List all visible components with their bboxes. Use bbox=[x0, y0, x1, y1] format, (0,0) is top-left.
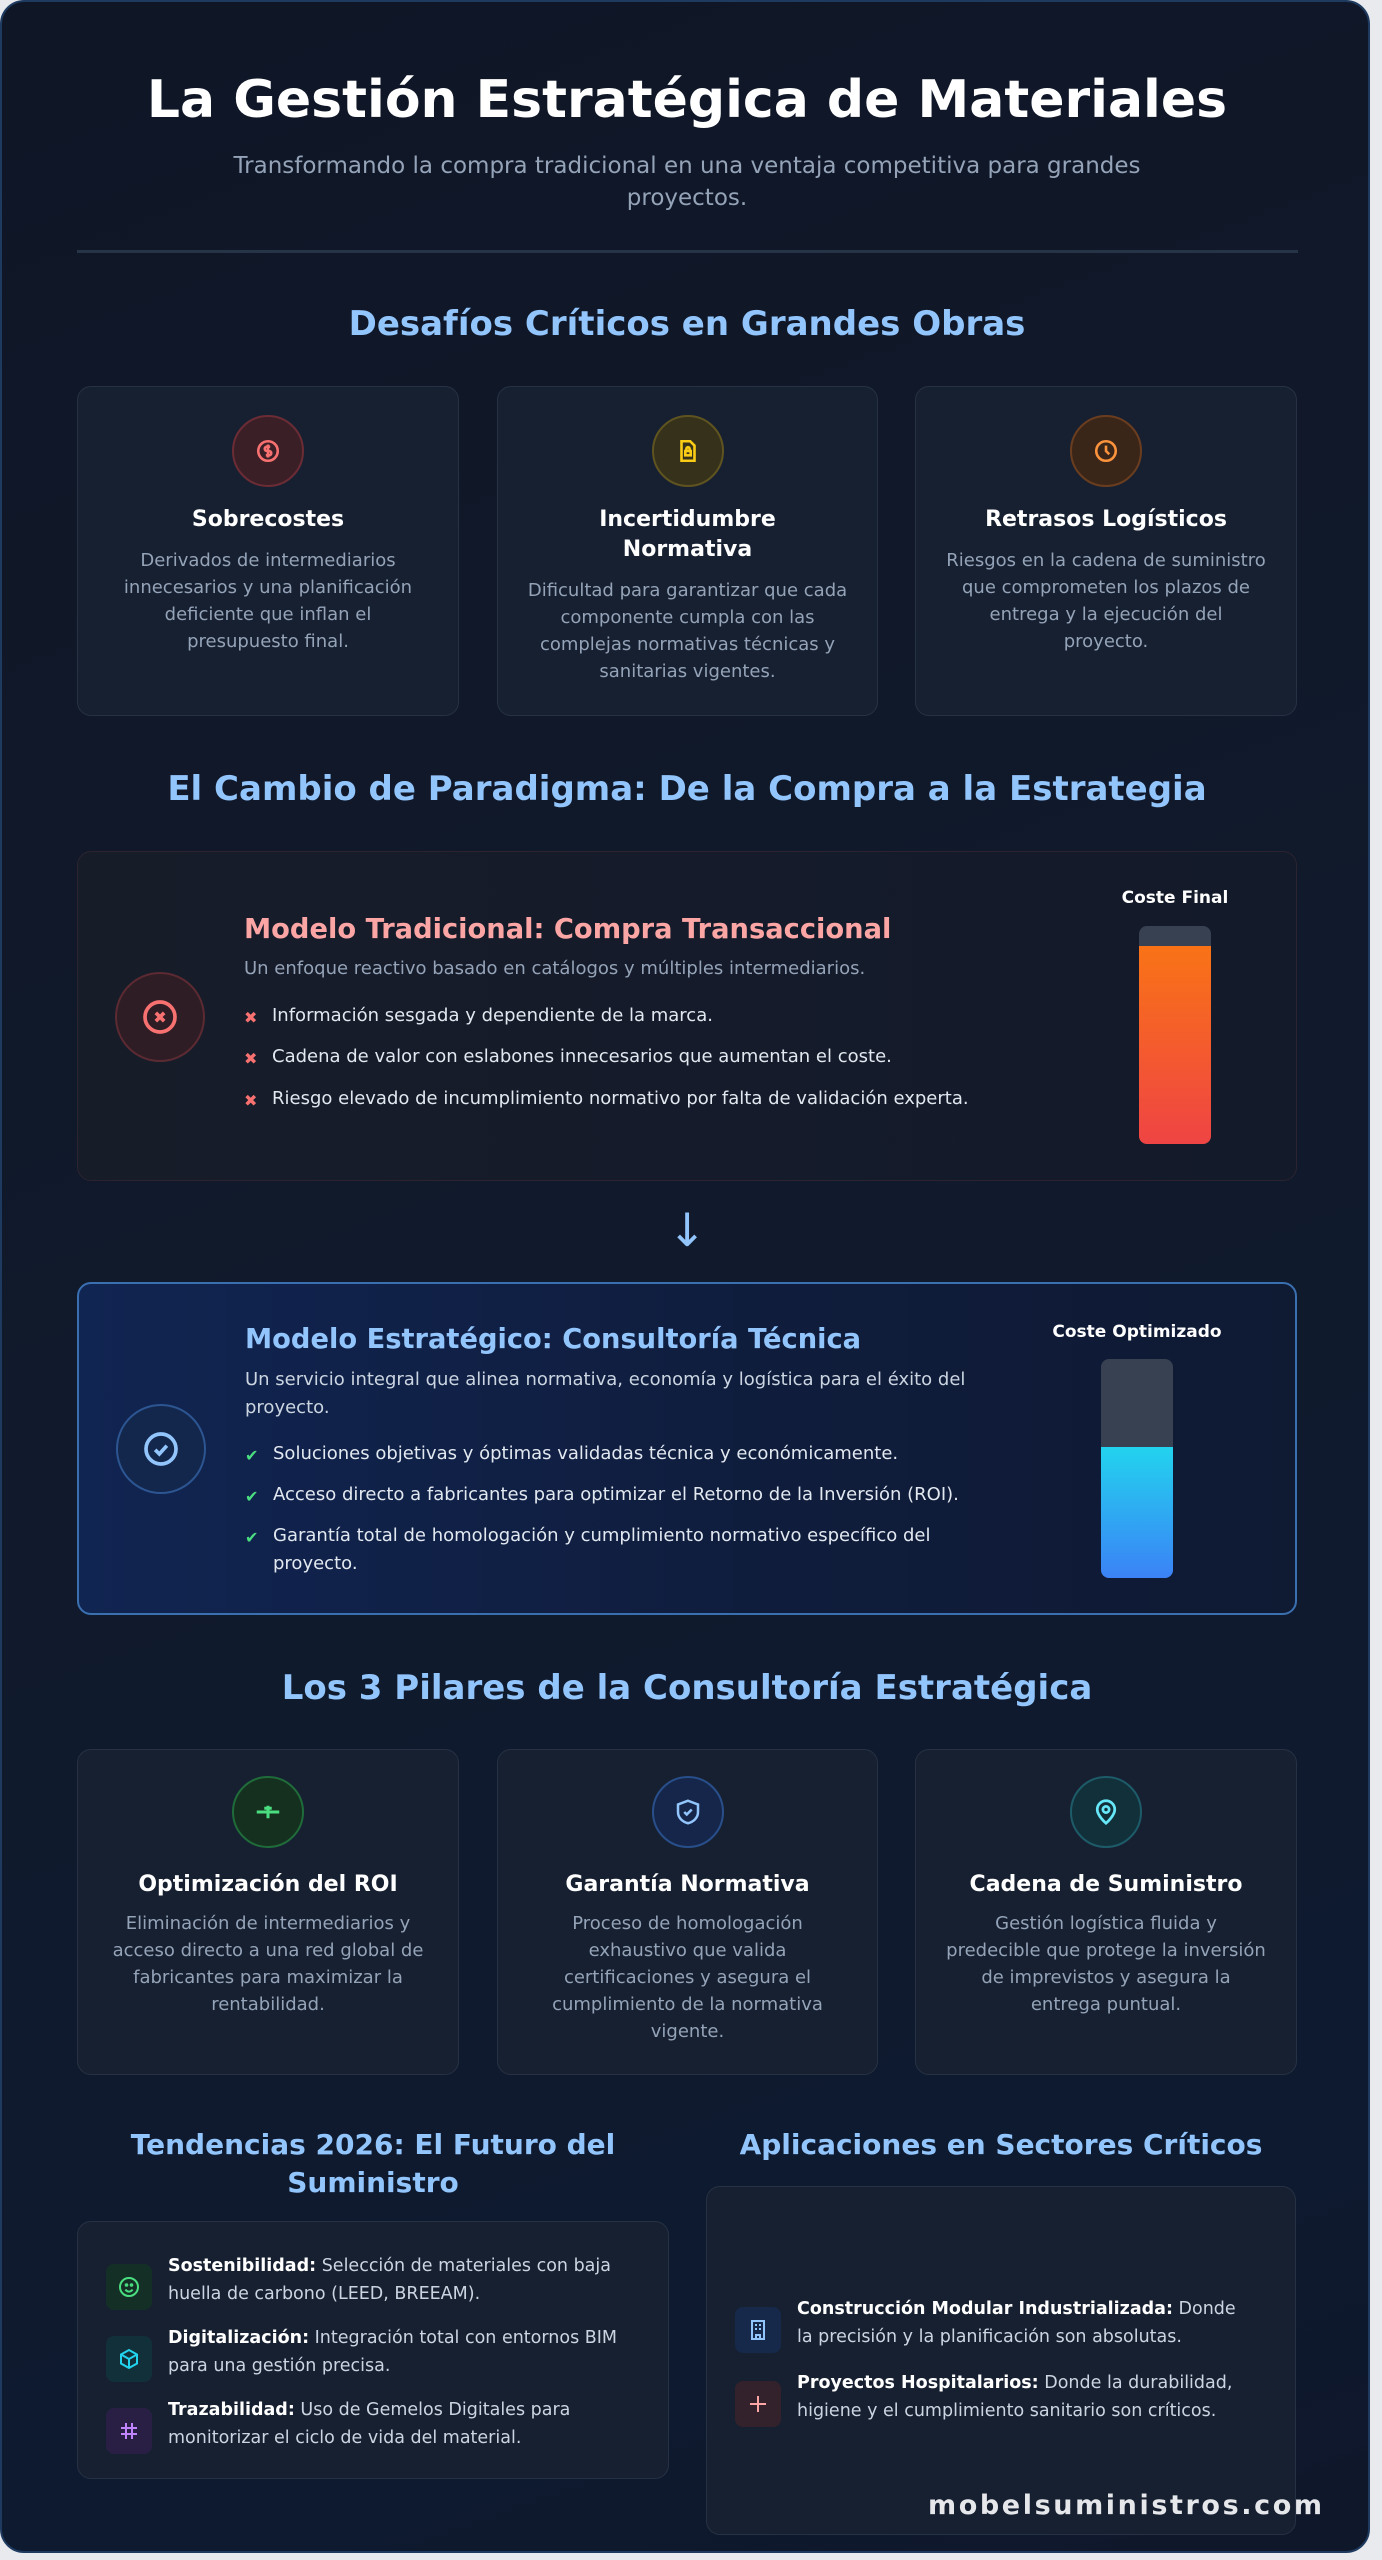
card title: Garantía Normativa bbox=[565, 1872, 810, 1897]
card text: exhaustivo que valida bbox=[589, 1940, 786, 1961]
card text: deficiente que inflan el bbox=[165, 604, 371, 625]
panel: modelo tradicional bbox=[77, 851, 1297, 1181]
item: trazabilidad: Trazabilidad: Uso de Gemelos Digitales para bbox=[168, 2400, 570, 2420]
item: sostenibilidad bbox=[106, 2256, 611, 2310]
subtitle: Transformando la compra tradicional en una ventaja competitiva para grandes proyectos. bbox=[233, 153, 1141, 211]
card text: Proceso de homologación bbox=[572, 1913, 803, 1934]
card text: Dificultad para garantizar que cada bbox=[528, 580, 847, 601]
card text bbox=[946, 550, 1266, 652]
panel: modelo estratégico: ✔ bbox=[245, 1528, 258, 1547]
card text: sanitarias vigentes. bbox=[599, 661, 776, 682]
heading: tendencias: Tendencias 2026: El Futuro del Suministro bbox=[131, 2128, 615, 2199]
card: cadena bbox=[915, 1749, 1297, 2075]
panel subtitle: Un servicio integral que alinea normativa, economía y logística para el éxito del proyecto. bbox=[245, 1369, 965, 1418]
card title: Sobrecostes bbox=[192, 507, 344, 532]
icon: shield bbox=[652, 1776, 724, 1848]
card text: innecesarios y una planificación bbox=[124, 577, 412, 598]
title: La Gestión Estratégica de Materiales bbox=[147, 70, 1227, 130]
watermark: mobelsuministros.com bbox=[928, 2490, 1325, 2521]
panel title: Modelo Estratégico: Consultoría Técnica bbox=[245, 1324, 861, 1355]
bullet list: Riesgo elevado de incumplimiento normativo por falta de validación experta. bbox=[272, 1088, 969, 1109]
card title: Incertidumbre bbox=[599, 507, 776, 532]
card text bbox=[552, 1913, 823, 2042]
card text: predecible que protege la inversión bbox=[946, 1940, 1266, 1961]
item: digitalización bbox=[106, 2328, 617, 2382]
card: sobrecostes bbox=[77, 386, 459, 716]
card: normativa bbox=[497, 386, 878, 716]
chart: coste optimizado bar: Coste Optimizado bbox=[1052, 1322, 1222, 1342]
item: trazabilidad: monitorizar el ciclo de vida del material. bbox=[168, 2428, 521, 2448]
card text bbox=[124, 550, 412, 652]
icon: roi bbox=[232, 1776, 304, 1848]
item: sostenibilidad: Sostenibilidad: Selección de materiales con baja bbox=[168, 2256, 611, 2276]
item: sostenibilidad: huella de carbono (LEED, BREEAM). bbox=[168, 2284, 480, 2304]
icon: check circle bbox=[116, 1404, 206, 1494]
card title bbox=[599, 507, 776, 562]
card text: componente cumpla con las bbox=[560, 607, 815, 628]
icon: document bbox=[652, 415, 724, 487]
chart: coste final bar bbox=[1122, 888, 1228, 1144]
card title: Normativa bbox=[623, 537, 752, 562]
card text: vigente. bbox=[651, 2021, 724, 2042]
card text: presupuesto final. bbox=[187, 631, 349, 652]
card: garantía bbox=[497, 1749, 878, 2075]
card text: proyecto. bbox=[1064, 631, 1148, 652]
item: construcción modular bbox=[735, 2299, 1236, 2353]
panel subtitle: Un enfoque reactivo basado en catálogos y múltiples intermediarios. bbox=[244, 958, 865, 979]
item: construcción modular: Construcción Modular Industrializada: Donde bbox=[797, 2299, 1236, 2319]
icon: clock bbox=[1070, 415, 1142, 487]
card text: entrega puntual. bbox=[1031, 1994, 1181, 2015]
bullet list: Soluciones objetivas y óptimas validadas técnica y económicamente. bbox=[273, 1443, 898, 1464]
card text: entrega y la ejecución del bbox=[990, 604, 1222, 625]
card text: de imprevistos y asegura la bbox=[981, 1967, 1231, 1988]
card text: Riesgos en la cadena de suministro bbox=[946, 550, 1266, 571]
icon: coin bbox=[232, 415, 304, 487]
panel: modelo tradicional: ✖ bbox=[244, 1008, 257, 1027]
bullet list: Información sesgada y dependiente de la marca. bbox=[272, 1005, 713, 1026]
bullet list bbox=[244, 1005, 969, 1110]
card text: que comprometen los plazos de bbox=[962, 577, 1250, 598]
card title: Retrasos Logísticos bbox=[985, 507, 1227, 532]
card text: certificaciones y asegura el bbox=[564, 1967, 811, 1988]
chart: coste optimizado bar bbox=[1052, 1322, 1222, 1578]
heading: cambio de paradigma: El Cambio de Paradigma: De la Compra a la Estrategia bbox=[167, 769, 1207, 809]
card text: rentabilidad. bbox=[211, 1994, 325, 2015]
card title: Cadena de Suministro bbox=[970, 1872, 1242, 1897]
heading: pilares: Los 3 Pilares de la Consultoría Estratégica bbox=[282, 1668, 1092, 1708]
item: hospitalarios: Proyectos Hospitalarios: Donde la durabilidad, bbox=[797, 2373, 1232, 2393]
card text bbox=[946, 1913, 1266, 2015]
icon: x circle bbox=[115, 972, 205, 1062]
card text bbox=[528, 580, 847, 682]
item: digitalización: para una gestión precisa. bbox=[168, 2356, 390, 2376]
panel title: Modelo Tradicional: Compra Transaccional bbox=[244, 914, 891, 945]
panel: modelo estratégico: ✔ bbox=[245, 1446, 258, 1465]
card: ROI bbox=[77, 1749, 459, 2075]
panel: modelo tradicional: ✖ bbox=[244, 1091, 257, 1110]
panel: tendencias bbox=[77, 2221, 669, 2479]
card text: cumplimiento de la normativa bbox=[552, 1994, 823, 2015]
card title: Optimización del ROI bbox=[138, 1872, 398, 1897]
card text bbox=[113, 1913, 423, 2015]
card: retrasos bbox=[915, 386, 1297, 716]
arrow: ↓ bbox=[668, 1203, 706, 1257]
bullet list: Cadena de valor con eslabones innecesarios que aumentan el coste. bbox=[272, 1046, 892, 1067]
panel: aplicaciones bbox=[706, 2186, 1296, 2535]
item: digitalización: Digitalización: Integración total con entornos BIM bbox=[168, 2328, 617, 2348]
item: trazabilidad bbox=[106, 2400, 570, 2454]
panel: modelo estratégico bbox=[77, 1282, 1297, 1615]
panel: modelo tradicional: ✖ bbox=[244, 1049, 257, 1068]
card text: Eliminación de intermediarios y bbox=[126, 1913, 410, 1934]
card text: fabricantes para maximizar la bbox=[133, 1967, 403, 1988]
card text: Gestión logística fluida y bbox=[995, 1913, 1217, 1934]
bullet list: Acceso directo a fabricantes para optimizar el Retorno de la Inversión (ROI). bbox=[273, 1484, 959, 1505]
card text: Derivados de intermediarios bbox=[140, 550, 396, 571]
heading: aplicaciones: Aplicaciones en Sectores Críticos bbox=[740, 2128, 1262, 2161]
icon: pin bbox=[1070, 1776, 1142, 1848]
item: construcción modular: la precisión y la planificación son absolutas. bbox=[797, 2327, 1182, 2347]
heading: desafíos: Desafíos Críticos en Grandes Obras bbox=[349, 304, 1025, 344]
item: hospitalarios bbox=[735, 2373, 1232, 2427]
item: hospitalarios: higiene y el cumplimiento sanitario son críticos. bbox=[797, 2401, 1216, 2421]
bullet list bbox=[245, 1443, 959, 1574]
panel: modelo estratégico: ✔ bbox=[245, 1487, 258, 1506]
bullet list: Garantía total de homologación y cumplimiento normativo específico del proyecto. bbox=[273, 1525, 930, 1574]
chart: coste final bar: Coste Final bbox=[1122, 888, 1228, 908]
card text: complejas normativas técnicas y bbox=[540, 634, 835, 655]
card text: acceso directo a una red global de bbox=[113, 1940, 423, 1961]
